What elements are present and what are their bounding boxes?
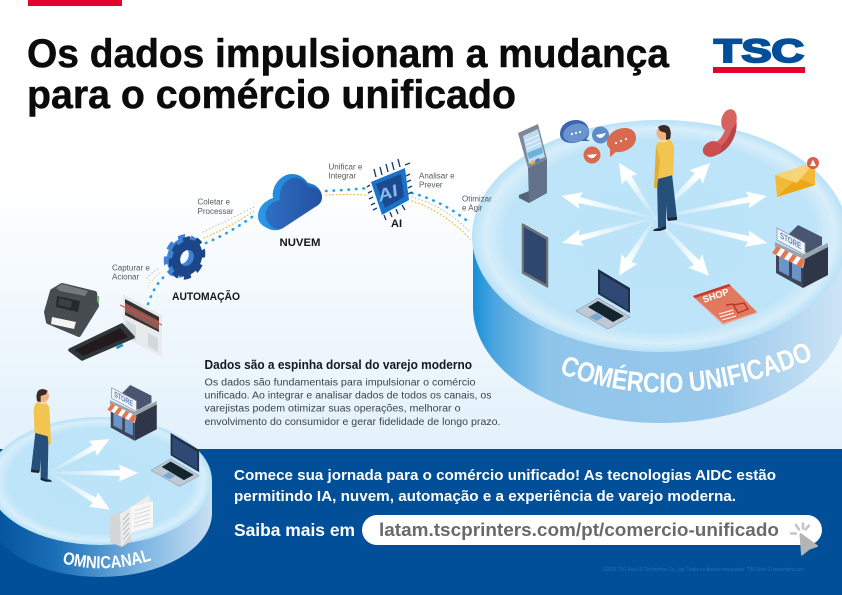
platform side with label: [2, 482, 212, 577]
step label: capture: Acionar: [112, 272, 139, 282]
label: NUVEM: NUVEM: [280, 237, 320, 249]
icon: handheld scanner: [70, 325, 133, 359]
step label: collect: Processar: [198, 207, 234, 216]
call to action text: Saiba mais em: [234, 520, 355, 540]
title: [27, 32, 670, 117]
step label: collect: Coletar e: [198, 198, 231, 206]
platform side with label: COMÉRCIO UNIFICADO: [562, 344, 810, 393]
label: AI: AI: [391, 218, 402, 230]
icon: storefront: [772, 225, 828, 288]
title: Os dados impulsionam a mudança: [27, 32, 670, 76]
label: AUTOMAÇÃO: AUTOMAÇÃO: [172, 290, 240, 303]
text block: data is the backbone: varejistas podem otimizar suas operações, melhorar o: [204, 404, 461, 414]
step label: analyse: Analisar e: [419, 172, 455, 180]
step label: analyse: Prever: [419, 180, 443, 190]
icon: click cursor: [791, 524, 817, 554]
platform side with label: OMNICANAL: [64, 550, 152, 568]
icon: cloud: [258, 174, 322, 230]
platform top surface: [0, 417, 212, 545]
icon: person standing: [653, 125, 677, 231]
text block: data is the backbone: unificado. Ao integrar e analisar dados de todos os canais, os: [204, 390, 492, 402]
text block: data is the backbone: envolvimento do consumidor e gerar fidelidade de longo prazo.: [204, 417, 500, 428]
call to action text: [234, 467, 776, 540]
icon: telephone handset: [700, 107, 739, 160]
url pill: [362, 515, 822, 545]
icon: AI chip: AI: [377, 180, 398, 206]
title: para o comércio unificado: [27, 73, 516, 117]
step label: unify: Integrar: [328, 172, 356, 180]
kiosk icon: [518, 124, 547, 203]
url pill: latam.tscprinters.com/pt/comercio-unificado: [379, 520, 779, 540]
step label: unify: Unificar e: [328, 162, 363, 172]
logo: TSC: TSC: [714, 33, 804, 69]
icon: laptop: [576, 269, 630, 329]
panel: unified commerce platform: [472, 109, 842, 423]
step label: capture: Capturar e: [112, 264, 150, 272]
icon: shop catalogue: [693, 284, 757, 325]
icon: tablet: [522, 224, 548, 287]
logo: TSC: [713, 33, 805, 73]
top red accent bar: [28, 0, 122, 6]
icon: storefront: STORE: [114, 390, 133, 409]
icon: printer: [46, 284, 99, 335]
text block: data is the backbone: Os dados são fundamentais para impulsionar o comércio: [204, 378, 476, 388]
panel: omnichannel platform: [0, 385, 212, 577]
arrows radiating from person: [560, 156, 769, 282]
call to action text: permitindo IA, nuvem, automação e a experiência de varejo moderna.: [234, 488, 736, 505]
platform side with label: [473, 248, 842, 423]
icon: AI chip: [367, 159, 412, 220]
icon: open book: [110, 495, 153, 547]
step label: optimise: Otimizar: [462, 194, 492, 204]
page background: [0, 0, 842, 450]
icon: email envelope with alert: [775, 157, 819, 197]
icon: shop catalogue: SHOP: [701, 286, 731, 306]
text block: data is the backbone: [204, 358, 500, 428]
call to action text: Comece sua jornada para o comércio unificado! As tecnologias AIDC estão: [234, 467, 776, 484]
flow path: connecting dotted lines: [147, 188, 471, 304]
icon: storefront: STORE: [780, 230, 801, 251]
icon: gear: [160, 231, 209, 283]
icon: storefront: [107, 385, 157, 441]
platform top surface: [472, 120, 842, 352]
step label: optimise: e Agir: [462, 204, 483, 212]
icon: laptop: [151, 433, 199, 486]
icon: person standing: [31, 389, 52, 482]
icon: barcode label: [120, 294, 162, 357]
arrows from person: [46, 432, 138, 517]
footer band background: [0, 449, 842, 595]
icon: chat bubbles: [560, 120, 636, 164]
text block: data is the backbone: Dados são a espinha dorsal do varejo moderno: [204, 358, 472, 372]
copyright note: ©2025 TSC Auto ID Technology Co., Ltd. Todos os direitos reservados. TSC Auto ID tscprinters.com: [603, 566, 804, 573]
